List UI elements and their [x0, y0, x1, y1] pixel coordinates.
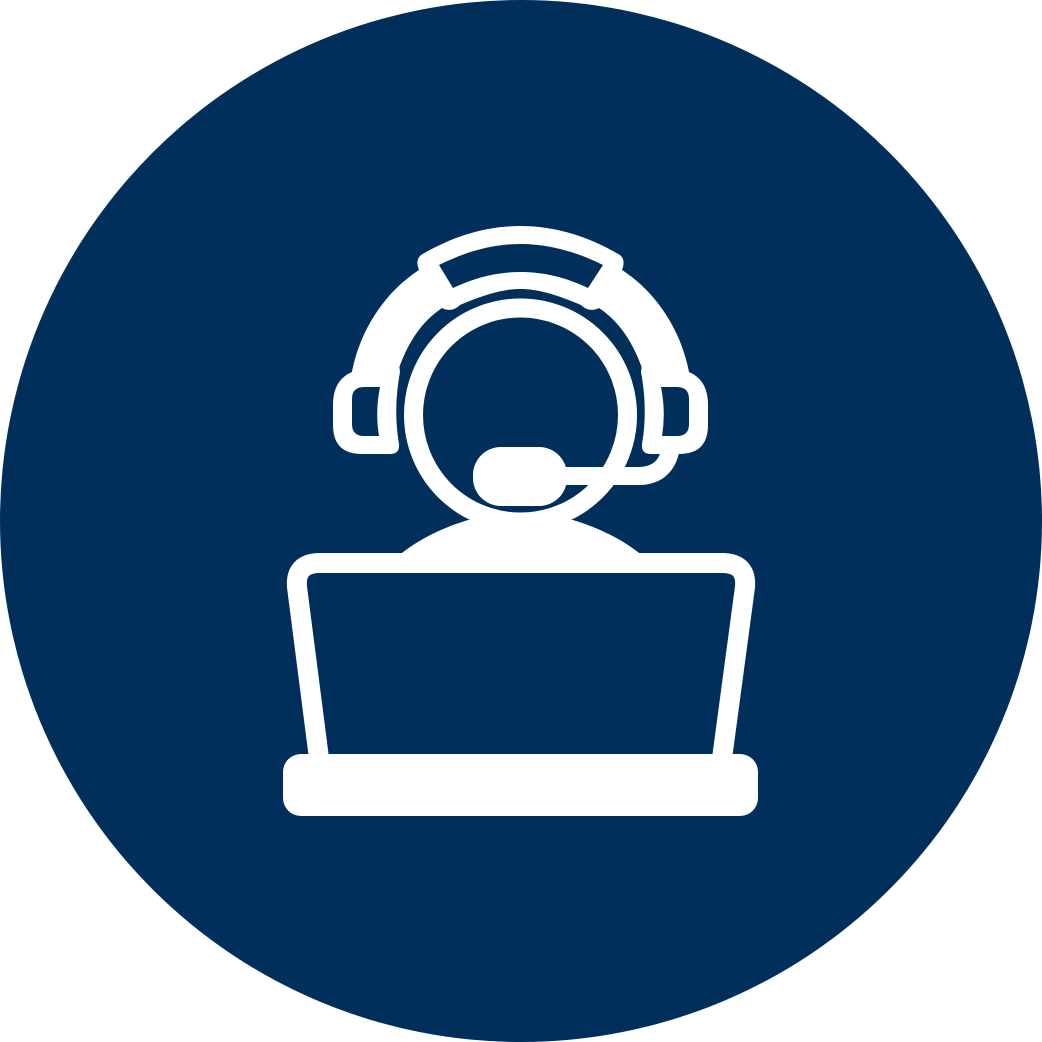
headset band	[352, 226, 689, 372]
head	[414, 308, 628, 522]
laptop screen	[297, 563, 745, 766]
microphone	[473, 447, 567, 506]
laptop base	[283, 754, 758, 816]
microphone arm	[555, 452, 670, 476]
agent figure	[283, 226, 758, 816]
shoulders	[398, 520, 643, 556]
right ear cup	[641, 364, 708, 454]
left ear cup	[333, 364, 400, 454]
